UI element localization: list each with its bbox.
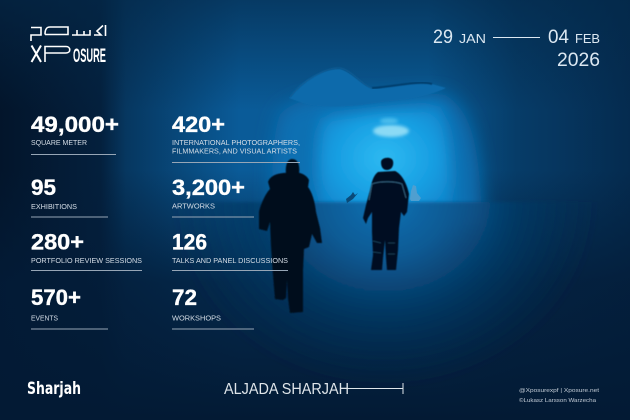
venue: Aljada Sharjah: ALJADA SHARJAH	[224, 381, 349, 398]
year: 2026	[557, 49, 600, 71]
stat: 95 exhibitions: 95	[31, 175, 56, 200]
stat: 420+ international photographers: INTERNATIONAL PHOTOGRAPHERS,	[172, 138, 300, 147]
stat: 49,000+ square meter: SQUARE METER	[31, 138, 87, 147]
stat: 126 talks and panel discussions: 126	[172, 230, 207, 254]
stat: 72 workshops: WORKSHOPS	[172, 314, 221, 322]
date block: FEB	[575, 32, 600, 46]
stat: 49,000+ square meter	[31, 112, 119, 154]
stat: 3,200+ artworks	[172, 175, 254, 217]
start date: 29	[433, 26, 453, 48]
stat: 126 talks and panel discussions: TALKS AND PANEL DISCUSSIONS	[172, 256, 288, 265]
distant figures	[346, 185, 421, 203]
stat: 280+ portfolio review sessions: 280+	[31, 230, 84, 254]
ice ledge	[289, 69, 446, 107]
stat: 95 exhibitions	[31, 175, 108, 217]
stat: 126 talks and panel discussions	[172, 230, 288, 270]
social handles and photo credit: ©Lukasz Larsson Warzecha	[519, 397, 597, 404]
date block: JAN	[459, 32, 486, 46]
logo: Xposure	[31, 25, 106, 67]
text: OSURE	[73, 46, 106, 67]
stat: 420+ international photographers: FILMMAKERS, AND VISUAL ARTISTS	[172, 146, 297, 156]
tunnel light	[317, 106, 452, 222]
tunnel arch	[272, 94, 482, 225]
silhouette: person right	[363, 158, 409, 270]
social handles and photo credit: @Xposurexpf | Xposure.net	[519, 388, 600, 394]
stat: 420+ international photographers	[172, 112, 300, 162]
social handles and photo credit	[519, 388, 600, 404]
date block	[433, 26, 600, 71]
stat: 570+ events	[31, 285, 108, 329]
stat: 72 workshops: 72	[172, 285, 197, 310]
stat: 3,200+ artworks: ARTWORKS	[172, 202, 215, 210]
end date: 04	[548, 26, 569, 48]
stat: 420+ international photographers: 420+	[172, 112, 225, 137]
stat: 3,200+ artworks: 3,200+	[172, 175, 245, 200]
Sharjah logo: Sharjah	[27, 379, 81, 398]
stat: 280+ portfolio review sessions	[31, 230, 142, 270]
silhouette: person left	[259, 159, 322, 313]
stat: 49,000+ square meter: 49,000+	[31, 112, 119, 137]
stat: 280+ portfolio review sessions: PORTFOLIO REVIEW SESSIONS	[31, 256, 142, 265]
floor	[0, 202, 630, 420]
stat: 570+ events: 570+	[31, 285, 81, 310]
logo Arabic mark	[31, 25, 106, 41]
stat: 95 exhibitions: EXHIBITIONS	[31, 202, 77, 211]
stat: 72 workshops	[172, 285, 254, 329]
ice bulge	[373, 125, 409, 137]
stat: 570+ events: EVENTS	[31, 314, 58, 322]
